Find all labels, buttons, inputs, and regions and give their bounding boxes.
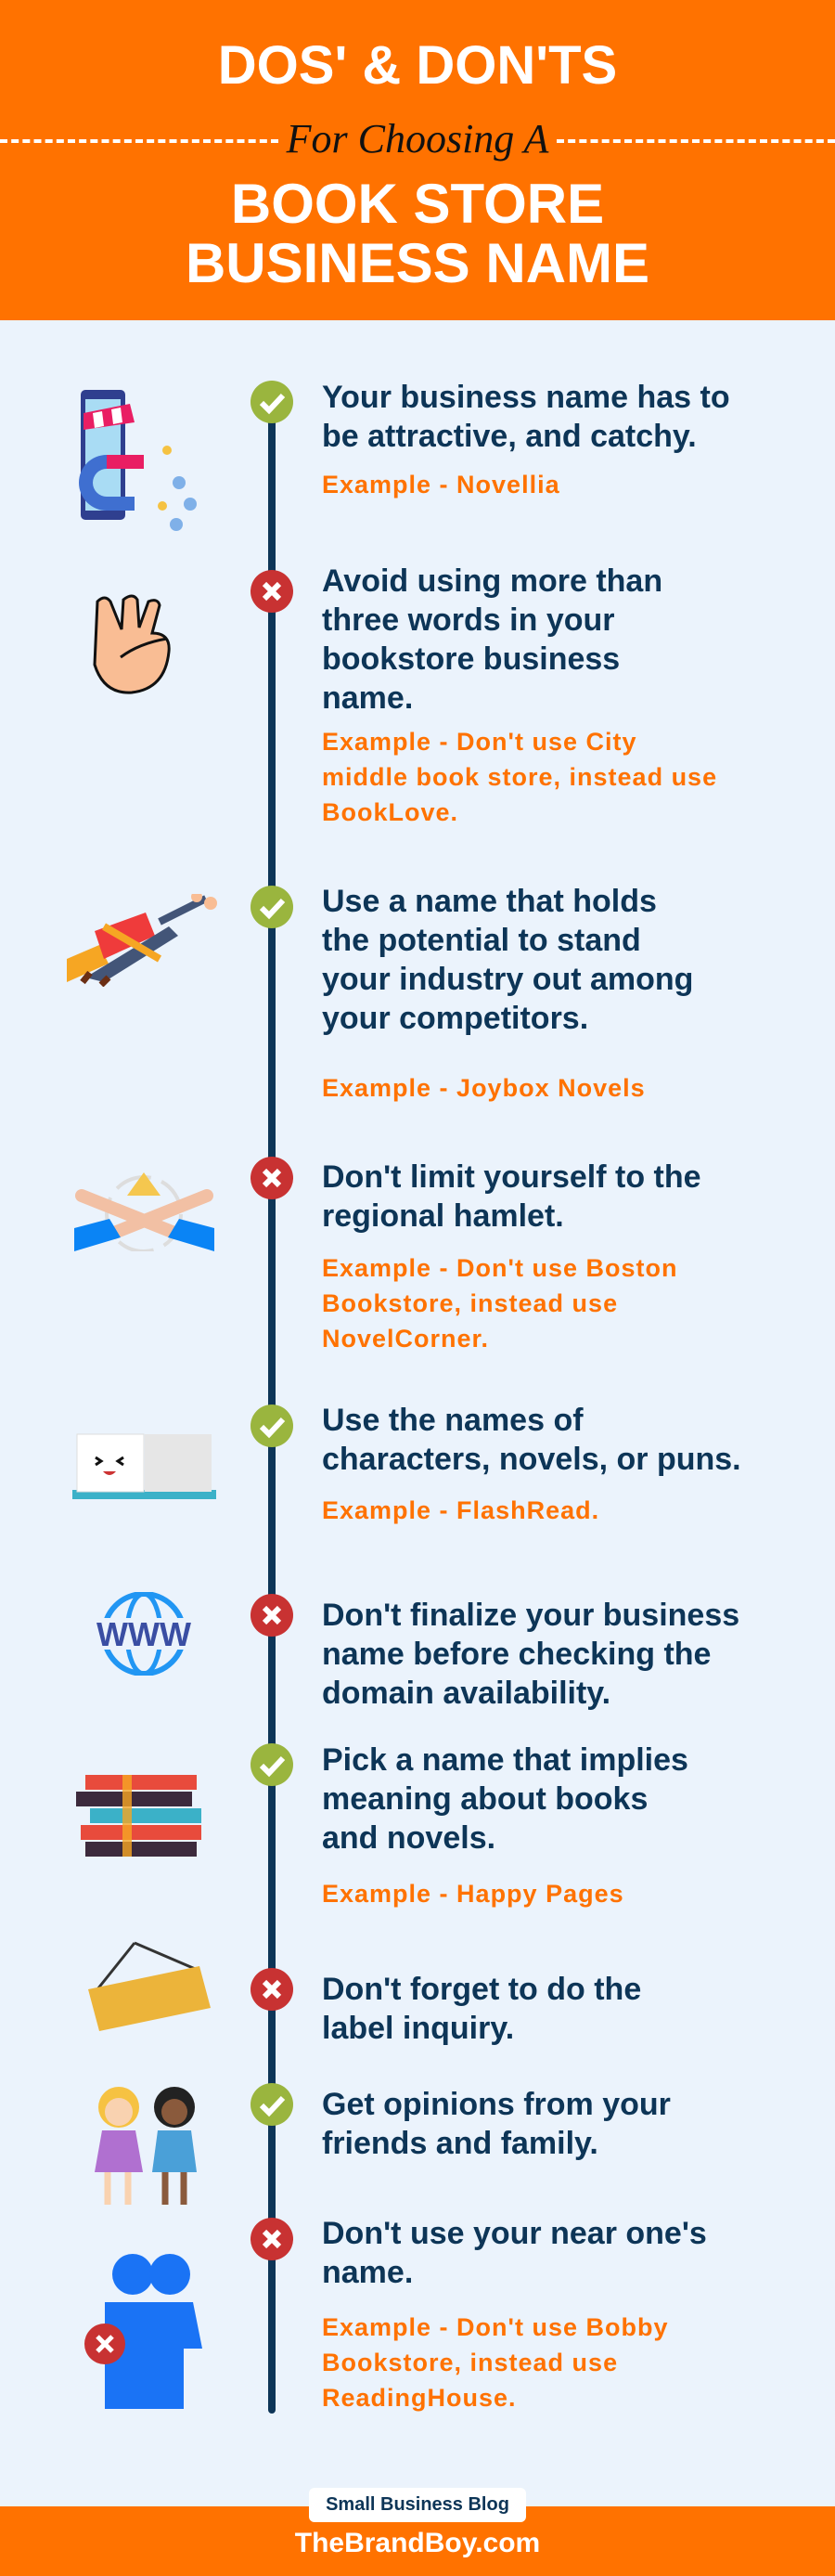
dashed line right	[557, 139, 835, 143]
item 2	[93, 563, 717, 826]
text: meaning about books	[322, 1781, 648, 1817]
text	[322, 1742, 688, 1856]
text: Your business name has to	[322, 380, 730, 415]
footer pill: Small Business Blog	[326, 2494, 509, 2515]
footer brand: TheBrandBoy.com	[295, 2528, 540, 2558]
item 10	[84, 2216, 707, 2412]
text: Avoid using more than	[322, 563, 662, 599]
text	[322, 563, 662, 716]
text: Don't forget to do the	[322, 1972, 641, 2007]
text: regional hamlet.	[322, 1198, 564, 1234]
example: middle book store, instead use	[322, 763, 717, 791]
example: Bookstore, instead use	[322, 1289, 618, 1317]
badge: check	[250, 886, 293, 928]
footer	[0, 2506, 835, 2576]
icon: www globe: WWW	[96, 1615, 191, 1653]
badge: check	[250, 1405, 293, 1447]
text: Get opinions from your	[322, 2087, 671, 2122]
item 9	[95, 2083, 671, 2205]
example	[322, 2313, 668, 2412]
text: and novels.	[322, 1820, 495, 1856]
example: Example - FlashRead.	[322, 1496, 599, 1524]
text	[322, 884, 693, 1036]
item 1	[79, 380, 730, 531]
title: book store business name: BOOK STORE	[231, 173, 604, 235]
icon: crossed hands warning	[74, 1172, 214, 1251]
badge: check	[250, 381, 293, 423]
badge: x	[250, 1594, 293, 1637]
icon: two people	[84, 2254, 202, 2409]
text: name before checking the	[322, 1637, 711, 1672]
badge: check	[250, 2083, 293, 2126]
text: your competitors.	[322, 1001, 588, 1036]
text	[322, 1598, 739, 1711]
badge: check	[250, 1743, 293, 1786]
badge: x	[250, 1968, 293, 2011]
timeline line	[268, 401, 276, 2414]
item 3	[67, 884, 693, 1102]
example: Example - Don't use City	[322, 728, 636, 756]
text: Don't limit yourself to the	[322, 1159, 701, 1195]
item 4	[74, 1157, 701, 1353]
item 7	[76, 1742, 688, 1908]
example: Example - Novellia	[322, 471, 560, 498]
text: name.	[322, 680, 413, 716]
text: three words in your	[322, 602, 614, 638]
text	[322, 2216, 707, 2290]
icon: rocket man	[67, 894, 217, 987]
badge: x	[250, 1157, 293, 1199]
icon: open book face	[72, 1433, 216, 1499]
icon: hand three fingers	[93, 594, 171, 694]
example: Example - Don't use Bobby	[322, 2313, 668, 2341]
example: NovelCorner.	[322, 1325, 489, 1353]
text: friends and family.	[322, 2126, 598, 2161]
text: Don't use your near one's	[322, 2216, 707, 2251]
text: Use a name that holds	[322, 884, 657, 919]
text: Pick a name that implies	[322, 1742, 688, 1778]
text: domain availability.	[322, 1676, 610, 1711]
icon: kids	[95, 2087, 197, 2205]
subtitle script: For Choosing A	[287, 116, 548, 162]
badge: x	[250, 2218, 293, 2260]
example: Example - Don't use Boston	[322, 1254, 677, 1282]
example	[322, 728, 717, 826]
dashed line left	[0, 139, 278, 143]
title: book store business name: BUSINESS NAME	[186, 232, 649, 294]
example: Example - Happy Pages	[322, 1880, 624, 1908]
text: Don't finalize your business	[322, 1598, 739, 1633]
item 5	[72, 1403, 741, 1524]
text: Use the names of	[322, 1403, 584, 1438]
badge: x	[250, 570, 293, 613]
text	[322, 2087, 671, 2161]
title: dos and donts: DOS' & DON'TS	[218, 35, 617, 96]
example: ReadingHouse.	[322, 2384, 517, 2412]
item 8	[88, 1942, 641, 2046]
example: BookLove.	[322, 798, 458, 826]
text	[322, 1403, 741, 1477]
text: label inquiry.	[322, 2011, 514, 2046]
text: be attractive, and catchy.	[322, 419, 697, 454]
icon: stack of books	[76, 1775, 201, 1857]
icon: hanging sign	[88, 1942, 211, 2031]
footer pill	[309, 2488, 526, 2522]
text	[322, 1159, 701, 1234]
example	[322, 1254, 677, 1353]
icon: magnet phone	[79, 390, 197, 531]
text: your industry out among	[322, 962, 693, 997]
text: name.	[322, 2255, 413, 2290]
text	[322, 380, 730, 454]
example: Bookstore, instead use	[322, 2349, 618, 2376]
item 6	[96, 1592, 739, 1711]
title: book store business name	[186, 173, 649, 294]
example: Example - Joybox Novels	[322, 1074, 646, 1102]
text	[322, 1972, 641, 2046]
header	[0, 0, 835, 320]
text: characters, novels, or puns.	[322, 1442, 741, 1477]
text: the potential to stand	[322, 923, 641, 958]
text: bookstore business	[322, 641, 620, 677]
icon: www globe	[96, 1592, 191, 1676]
